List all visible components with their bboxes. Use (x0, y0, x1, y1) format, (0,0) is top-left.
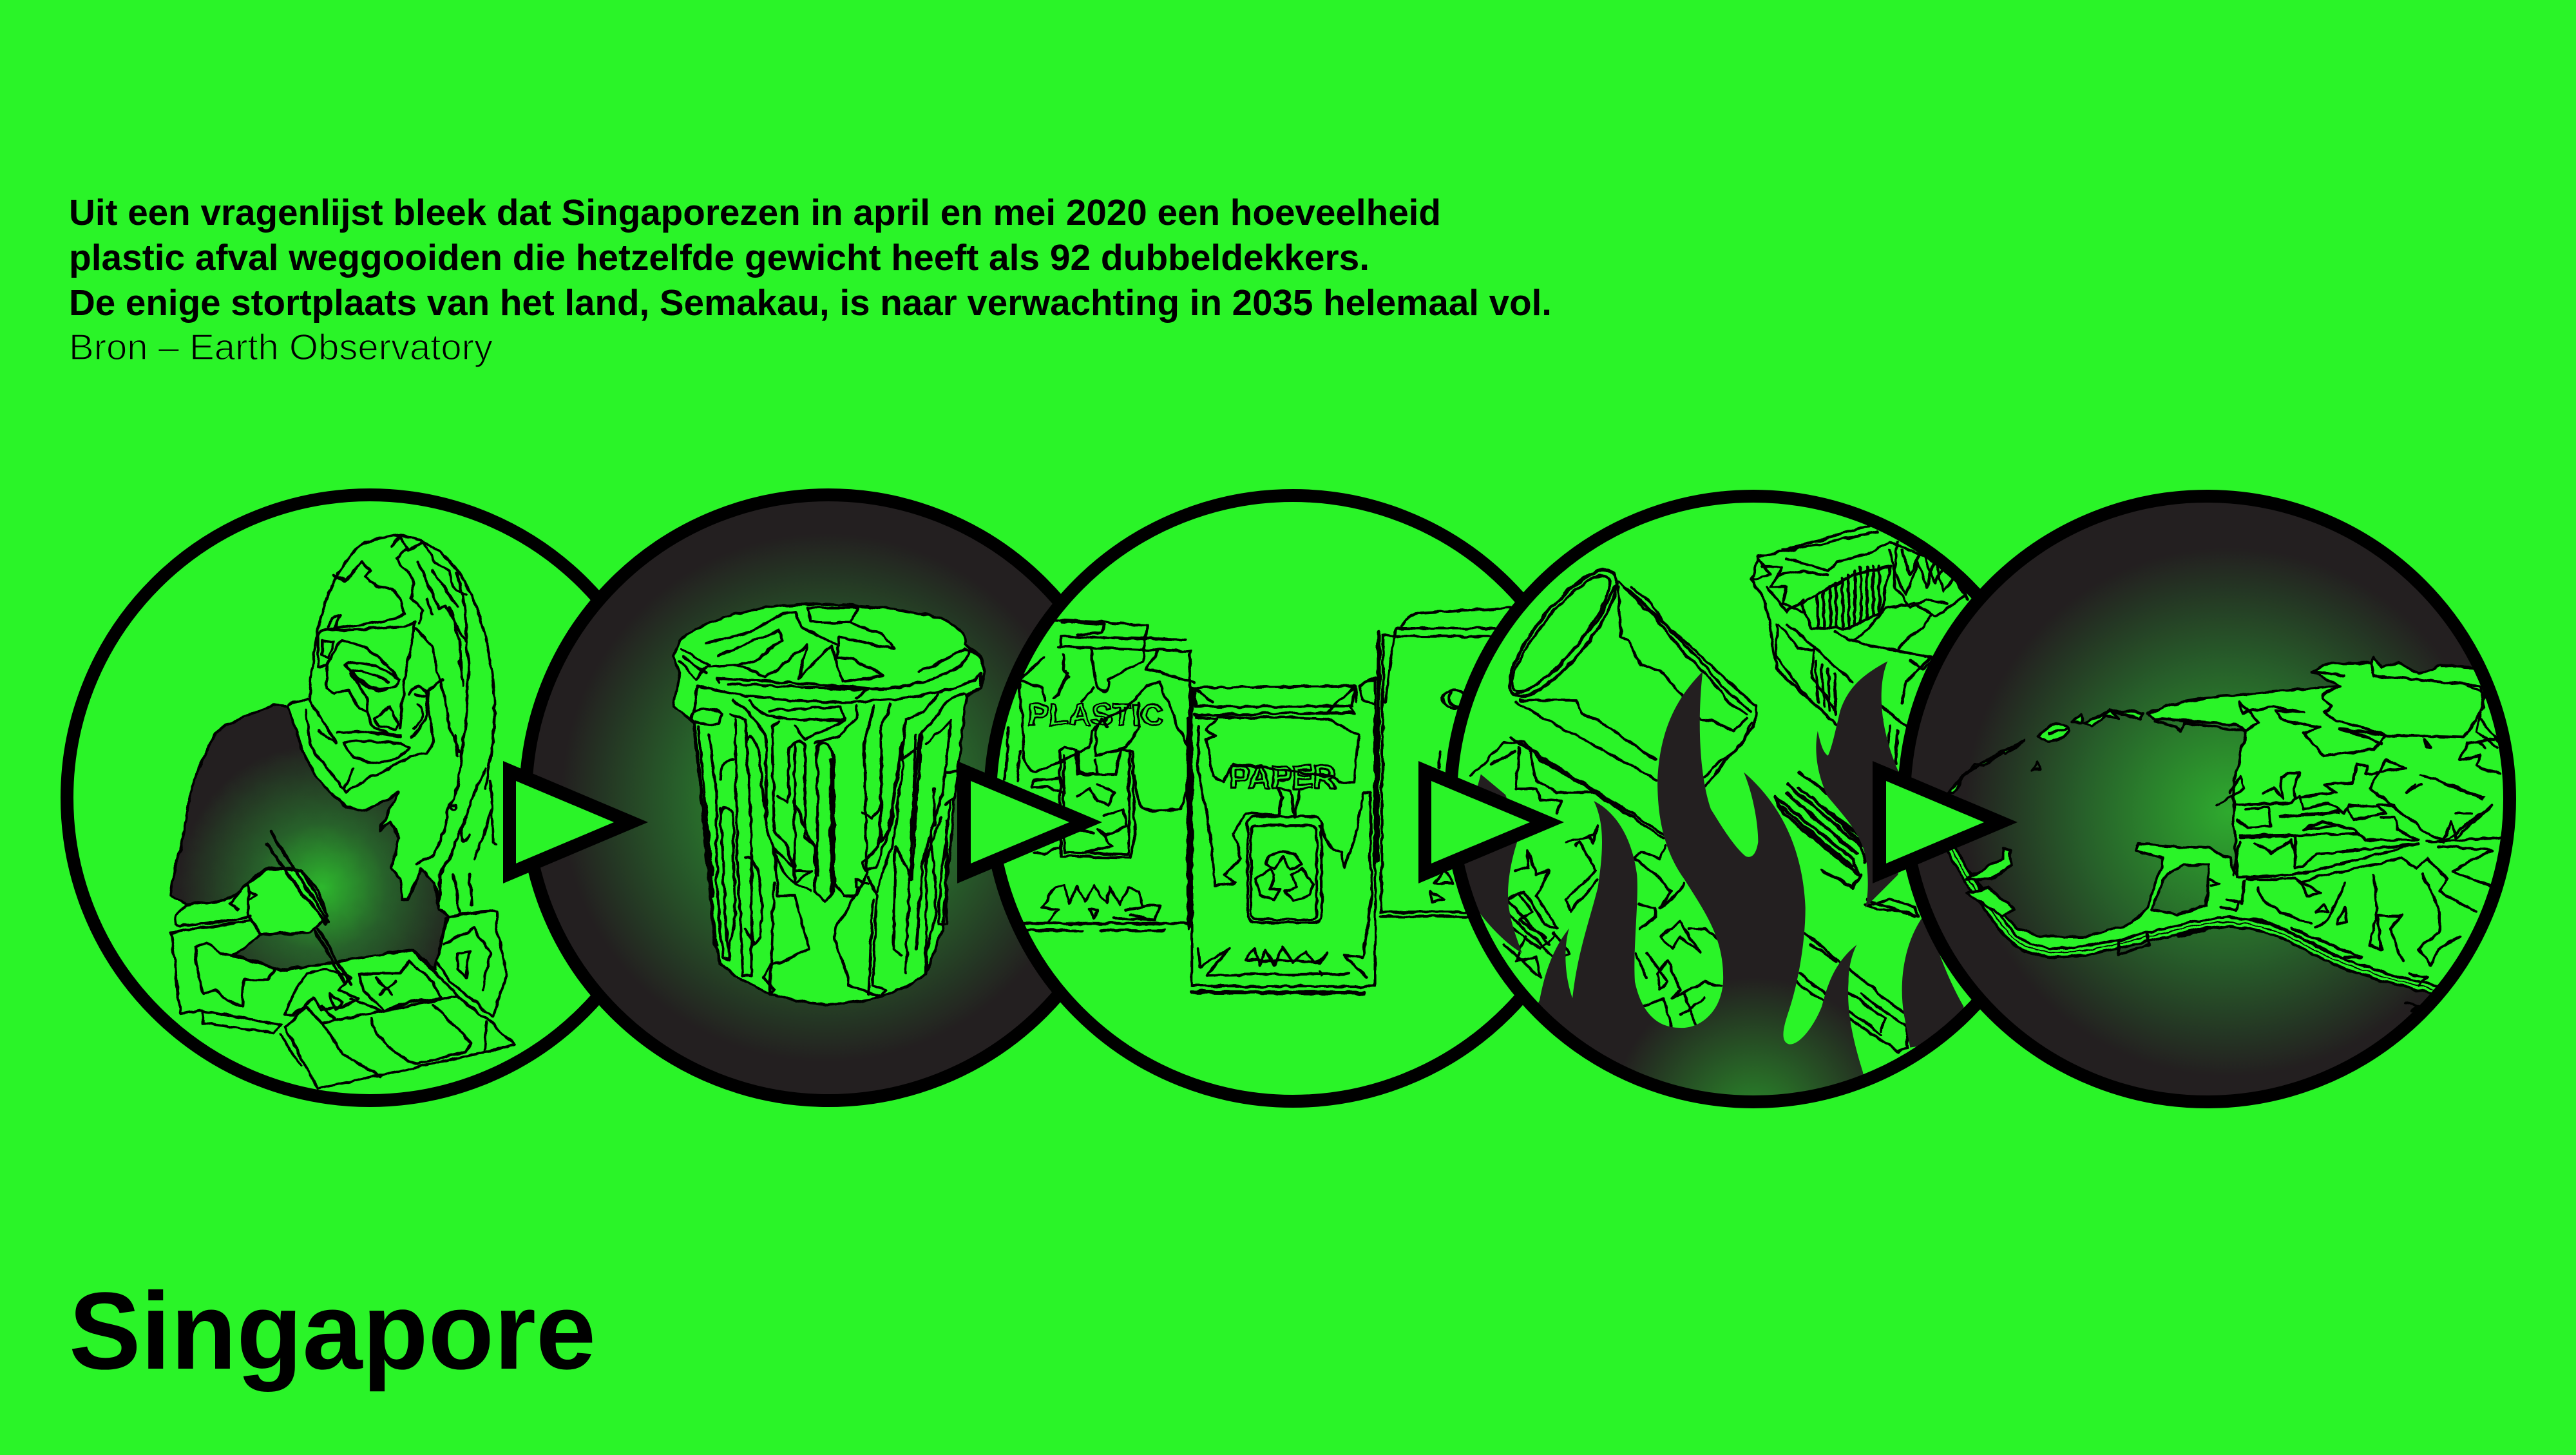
circle background 1 (67, 495, 673, 1101)
intro text block: Bron – Earth Observatory (69, 327, 493, 368)
panel: waste bin (526, 495, 1131, 1101)
illustration: woman eating with chopsticks (171, 535, 515, 1088)
circle background 3 (990, 496, 1596, 1101)
circle background 4 (1451, 496, 2056, 1102)
illustration: plastic and paper bags (1006, 608, 1512, 993)
line art: cup, tray and bags (1471, 526, 1968, 1052)
illustration: incineration of packaging (1458, 526, 1968, 1105)
circle outline 5 (1904, 496, 2510, 1102)
title: Singapore (69, 1270, 596, 1392)
panel: burning plastic waste (1445, 490, 1980, 1108)
arrow 2 (957, 761, 1102, 883)
arrow 3 (1418, 761, 1564, 883)
illustration: lidded trash can (674, 604, 984, 1005)
circle outline 1 (67, 495, 673, 1101)
circle outline 3 (990, 496, 1596, 1101)
intro text block: De enige stortplaats van het land, Semakau, is naar verwachting in 2035 helemaal vol. (69, 282, 1552, 323)
circle outline 4 (1451, 496, 2056, 1102)
circle outline 2 (526, 495, 1131, 1101)
intro text block: plastic afval weggooiden die hetzelfde gewicht heeft als 92 dubbeldekkers. (69, 237, 1369, 278)
panel: person eating takeaway (67, 495, 673, 1101)
illustration: plastic and paper bags: PAPER (1229, 759, 1336, 796)
circle background 2 (526, 495, 1131, 1101)
illustration: plastic and paper bags: PLASTIC (1028, 698, 1163, 731)
intro text block (69, 192, 1552, 368)
panel: Semakau landfill island map (1904, 496, 2525, 1102)
arrow 1 (503, 761, 648, 883)
circle background 5 (1904, 496, 2510, 1102)
intro text block: Uit een vragenlijst bleek dat Singaporezen in april en mei 2020 een hoeveelheid (69, 192, 1441, 233)
panel: recycling packaging (990, 496, 1596, 1101)
flames (1458, 661, 1968, 1105)
illustration: aerial coastline of the island (1948, 657, 2525, 1010)
arrow 4 (1873, 761, 2018, 883)
